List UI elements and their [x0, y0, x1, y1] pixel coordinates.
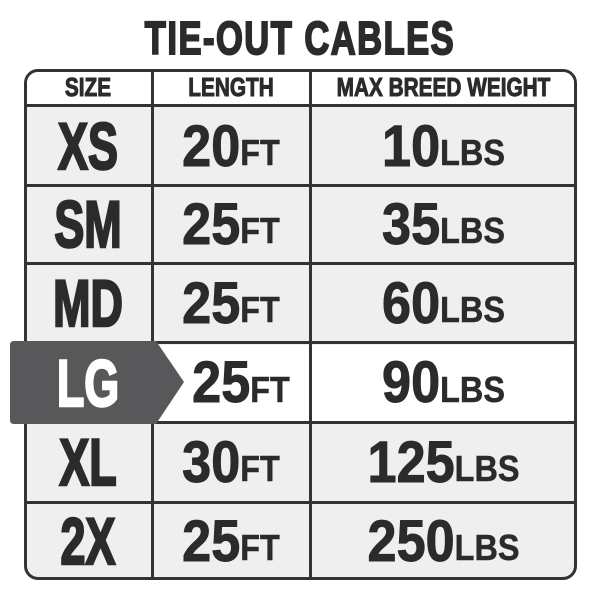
- text: LBS: [455, 527, 519, 568]
- text: 35: [382, 192, 440, 256]
- text: 250: [368, 508, 455, 574]
- text: 25: [182, 270, 240, 336]
- text: LENGTH: [188, 72, 274, 102]
- title: TIE-OUT CABLES: [145, 12, 455, 64]
- text: MD: [53, 266, 123, 340]
- text: LBS: [455, 448, 519, 489]
- text: XL: [59, 425, 117, 499]
- LG highlight tag: [10, 341, 184, 424]
- text: 2X: [61, 504, 115, 578]
- text: LBS: [440, 289, 505, 330]
- text: FT: [240, 448, 280, 489]
- length column: [182, 114, 290, 574]
- text: FT: [250, 368, 290, 410]
- text: 20: [182, 114, 240, 178]
- text: FT: [240, 289, 280, 330]
- text: 60: [382, 270, 440, 336]
- text: MAX BREED WEIGHT: [337, 72, 550, 102]
- text: SM: [54, 187, 122, 261]
- text: XS: [58, 109, 118, 183]
- text: 90: [382, 350, 440, 415]
- header row: [65, 72, 550, 102]
- weight column: [368, 114, 519, 574]
- text: LBS: [440, 210, 505, 251]
- text: LBS: [440, 368, 505, 410]
- text: FT: [240, 210, 280, 251]
- text: LG: [57, 346, 119, 420]
- size labels: [53, 109, 123, 578]
- text: 30: [182, 430, 240, 494]
- text: LBS: [440, 132, 505, 173]
- text: 10: [382, 114, 440, 178]
- text: 125: [368, 430, 455, 494]
- text: SIZE: [65, 72, 111, 102]
- text: 25: [182, 192, 240, 256]
- text: 25: [192, 350, 250, 415]
- text: FT: [240, 132, 280, 173]
- text: FT: [240, 527, 280, 568]
- table: [24, 69, 577, 580]
- text: 25: [182, 508, 240, 574]
